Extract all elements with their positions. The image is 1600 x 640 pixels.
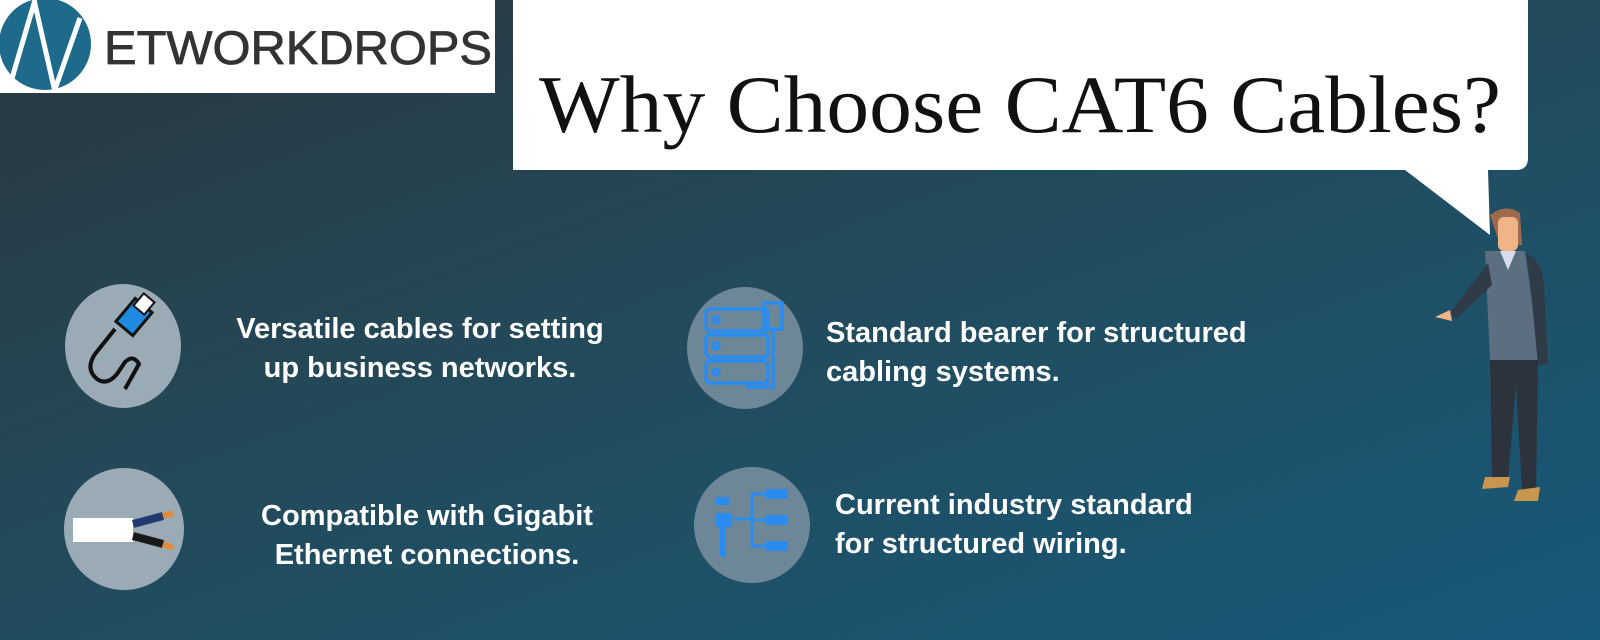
text: compatible: [261, 500, 593, 571]
text: versatile: [236, 313, 604, 384]
text: standard bearer: [826, 317, 1247, 388]
logo text: ETWORKDROPS: [104, 21, 492, 74]
person illustration: [1435, 208, 1548, 501]
text: compatible: Ethernet connections.: [275, 539, 579, 571]
text: standard bearer: Standard bearer for structured: [826, 317, 1247, 349]
icon: ethernet cable: [65, 284, 181, 408]
icon: logo circle: [0, 0, 91, 92]
icon: cable wires: [64, 468, 184, 590]
text: industry standard: for structured wiring.: [835, 528, 1127, 560]
icon: server rack: [687, 287, 803, 409]
text: compatible: Compatible with Gigabit: [261, 500, 593, 532]
text: versatile: Versatile cables for setting: [236, 313, 604, 345]
title bubble: [513, 0, 1528, 235]
title: Why Choose CAT6 Cables?: [539, 59, 1501, 150]
text: standard bearer: cabling systems.: [826, 356, 1060, 388]
text: industry standard: Current industry standard: [835, 489, 1193, 521]
icon: network diagram: [694, 467, 810, 583]
text: industry standard: [835, 489, 1193, 560]
logo: [0, 0, 495, 93]
text: versatile: up business networks.: [264, 352, 576, 384]
